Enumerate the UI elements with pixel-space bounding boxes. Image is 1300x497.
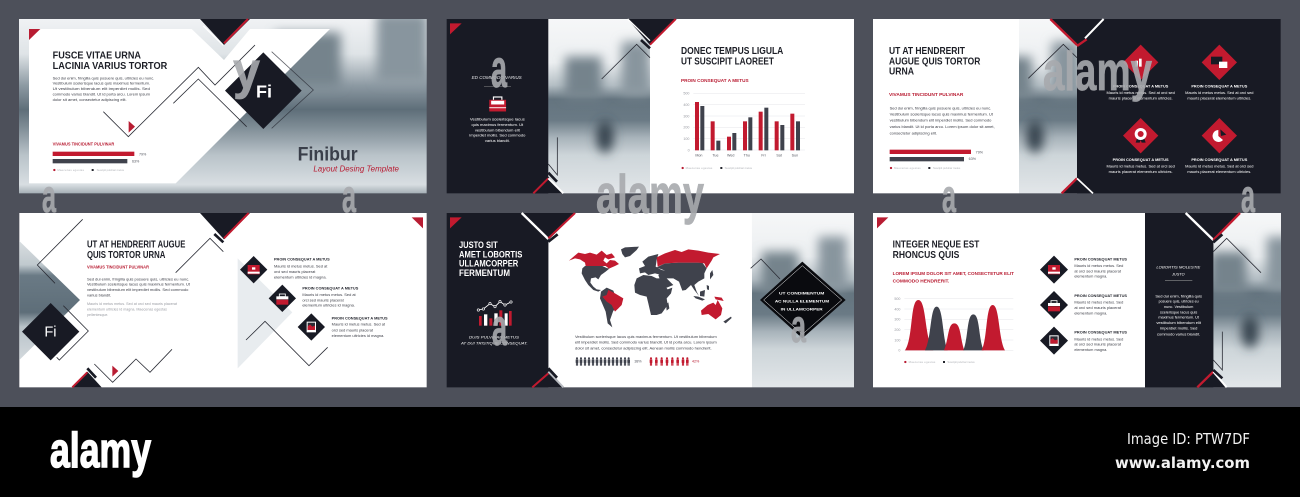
slide title: QUIS TORTOR URNA [87,250,165,261]
slide 3: four icon grid [873,19,1281,193]
red marker triangle [129,121,135,133]
slide title [53,50,167,72]
feature step 3: elementum ultricies id magna. [332,333,384,338]
angled stripes [1050,19,1104,193]
feature row 3: elementum magna. [1074,347,1107,352]
body text: Ut vestibulum bibendum elit imperdiet mollis. Sed [53,86,150,91]
body text: Vestibulum scelerisque lacus quis maximus fermentum. Ut [87,282,191,287]
dark sidebar [1145,213,1240,387]
feature: medal icon: Mauris id metus metus. Sed at orci sed [1106,163,1175,168]
progress bars: 63% [969,157,977,161]
bar chart: 400 [683,103,689,107]
bar chart: Fri [761,154,766,158]
feature row 1 [1040,256,1127,284]
chart legend: Maecenas egestas [686,166,713,170]
sidebar body text: commodo varius blandit. [1157,331,1200,336]
white angled panel [29,29,330,183]
slide title: UT SUSCIPIT LAOREET [681,56,774,67]
watermarks: a [791,300,806,352]
sidebar body text: maximus fermentum. Ut [1158,315,1200,320]
bar chart [683,92,805,158]
feature: medal icon: PROIN CONSEQUAT A METUS [1113,157,1169,162]
feature step 1: elementum ultricies id magna. [274,274,327,279]
red lead text [893,271,1014,284]
red corner triangle [412,217,423,228]
feature row 2: PROIN CONSEQUAT METUS [1074,293,1127,298]
brand text: Layout Desing Template [313,165,400,174]
slide 6: area chart [873,213,1295,387]
watermarks: a [1241,170,1255,222]
sidebar title [459,240,522,278]
feature row 1: at orci sed mauris placerat [1074,268,1122,273]
feature row 1: PROIN CONSEQUAT METUS [1074,256,1127,261]
body text: Sed dui enim, fringilla quis posuere quis, ultricies eu nunc. [890,105,991,110]
watermarks: a [942,170,956,222]
decorative lines [1213,238,1261,370]
area chart: 400 [894,307,900,311]
red corner triangle [450,217,462,228]
feature step 3: Mauris id metus metus. Sed at [332,322,386,327]
progress bars: 79% [976,150,984,154]
feature row 2: Mauris id metus metus. Sed [1074,300,1123,305]
brand text [298,145,400,174]
feature step 1: orci sed mauris placerat [274,269,316,274]
feature row 1: elementum magna. [1074,274,1107,279]
body text: varius blandit. Ut id porta arcu. Lorem ipsum dolor sit amet, [890,124,995,129]
chart heading: PROIN CONSEQUAT A METUS [681,78,749,83]
body text: vestibulum bibendum elit imperdiet mollis. Sed commodo [87,287,189,292]
bottom notch [72,368,102,387]
people stat: 42% [650,357,700,366]
black callout diamond [760,262,846,338]
grey note text: Mauris id metus metus. Sed at orci sed mauris placerat [87,302,177,306]
feature row 2: at orci sed mauris placerat [1074,305,1122,310]
white slide base [650,19,854,193]
feature: pie icon: mauris placerat elementum ultricies. [1187,169,1251,174]
angled stripes [1186,213,1240,387]
sidebar body text [1155,293,1202,336]
feature: medal icon: mauris placerat elementum ultricies. [1109,169,1173,174]
progress heading: VIVAMUS TINCIDUNT PULVINAR [53,142,115,147]
feature step 1 [240,256,330,283]
blurred photo [752,213,854,387]
photo triangle [19,241,80,360]
red corner triangle [877,217,888,228]
feature: bar icon: PROIN CONSEQUAT A METUS [1113,83,1169,88]
slide title: DONEC TEMPUS LIGULA [681,46,783,57]
sidebar body text: vestibulum bibendum elit [475,127,521,132]
feature step 2: orci sed mauris placerat [302,297,345,302]
map caption: elit imperdiet mollis. Sed commodo varius blandit. Ut id porta arcu. Lorem ipsum [575,340,717,345]
slide 1: cover [19,13,428,193]
feature row 2 [1040,291,1127,319]
feature: medal icon [1106,118,1175,174]
body text: commodo varius blandit. Ut id porta arcu. Lorem ipsum [53,92,151,97]
sidebar heading: ED COMMODO VARIUS [472,75,522,80]
area chart: 200 [894,328,900,332]
feature: chat icon [1185,45,1253,101]
legend: Maecenas egestas [57,168,85,172]
black callout diamond: UT CONDIMENTUM [779,290,825,295]
red subheading: VIVAMUS TINCIDUNT PULVINAR [889,92,964,97]
area chart: 100 [894,338,900,342]
progress bars: 79% [139,152,147,156]
slide 2: bar chart [447,19,854,193]
blurred city photo [19,13,428,193]
watermarks [42,39,1255,357]
slide title: UT AT HENDRERIT AUGUE [87,240,186,251]
red marker triangle [112,366,118,377]
icon: briefcase [489,97,506,111]
feature step 2 [269,285,359,312]
alamy logo: alamy [50,424,151,478]
red lead text: COMMODO HENDRERIT. [893,279,949,284]
sidebar body text: imperdiet mollis. Sed commodo [469,133,526,138]
feature: pie icon [1185,118,1253,174]
progress bars [890,150,984,161]
bar chart: Thu [744,154,750,158]
body text: consectetur adipiscing elit. [890,130,937,135]
legend [53,168,125,172]
sidebar body text: Vestibulum scelerisque lacus [470,117,525,122]
sidebar body text: nunc. Vestibulum [1164,304,1194,309]
dark panel [1050,19,1281,193]
body text [890,105,995,135]
people stat: 42%: 42% [692,360,700,364]
bottom notch [533,173,563,193]
dark top notch [200,19,250,45]
bar chart: 100 [683,137,689,141]
red corner triangle [450,23,462,34]
watermarks: y [233,42,260,100]
bar chart: Wed [727,154,734,158]
body text [53,75,154,102]
slide title [87,240,186,261]
website url: www.alamy.com [1115,454,1250,472]
sidebar body text: quis maximus fermentum. Ut [471,122,524,127]
sidebar body text: Sed dui enim, fringilla quis [1155,293,1202,298]
body text: Sed dui enim, fringilla quis posuere quis, ultricies eu nunc. [87,276,189,281]
bar chart: 0 [688,148,690,152]
people stat: 38%: 38% [634,360,642,364]
feature: bar icon: Mauris id metus metus. Sed at orci sed [1106,90,1175,95]
feature row 3: at orci sed mauris placerat [1074,342,1122,347]
world map [569,247,732,327]
progress bars: 63% [132,159,140,163]
bottom dark corner [1197,372,1227,387]
blurred photo [1213,213,1281,388]
bar chart: Sat [776,154,782,158]
sidebar body text: imperdiet mollis. Sed [1160,325,1197,330]
feature: bar icon: mauris placerat elementum ultricies. [1109,96,1173,101]
slide title [681,46,783,67]
sidebar body text [469,117,526,143]
feature step 3 [298,313,388,341]
top notch [200,213,250,242]
watermarks: alamy [596,163,704,225]
black callout diamond: IN ULLAMCORPER [781,306,823,311]
chart legend: Maecenas egestas [909,360,936,364]
sidebar title: FERMENTUM [459,268,510,278]
legend: Maecenas egestas [894,166,921,170]
watermarks: a [42,170,56,222]
bar chart: Mon [695,154,702,158]
sidebar title: AMET LOBORTIS [459,249,522,259]
red subheading: VIVAMUS TINCIDUNT PULVINAR [87,265,150,270]
bar chart: 300 [683,114,689,118]
sidebar caption [460,334,528,345]
progress bars [53,152,147,163]
white slide base [19,213,427,387]
sidebar heading [472,75,522,86]
slide title: RHONCUS QUIS [893,250,960,261]
dark sidebar [447,213,576,387]
bar chart: 500 [683,92,689,96]
legend: Suscipit pulvinar metus [97,168,125,172]
decorative lines [37,219,223,382]
slide title: INTEGER NEQUE EST [893,240,979,251]
bar chart: Sun [792,154,798,158]
sidebar caption: AT DUI TRISTIQUE CONSEQUAT. [460,340,528,345]
sidebar body text: scelerisque lacus quis [1160,309,1197,314]
area chart: 300 [894,318,900,322]
slide title: AUGUE QUIS TORTOR [889,56,980,67]
grey note text [87,302,177,317]
feature step 3: orci sed mauris placerat [332,327,374,332]
top notch [628,19,677,48]
feature: pie icon: PROIN CONSEQUAT A METUS [1191,157,1248,162]
sidebar body text: vestibulum bibendum elit [1156,320,1202,325]
white text panel [873,19,1019,193]
feature step 2: Mauris id metus metus. Sed at [302,292,357,297]
body text: dolor sit amet, consectetur adipiscing elit. [53,97,127,102]
map caption [575,334,717,350]
legend [890,166,961,170]
blurred photo [1019,19,1077,194]
watermarks: alamy [1043,40,1152,102]
decorative line [751,259,780,279]
decorative zigzag lines [103,45,313,137]
sidebar heading: LOBORTIS MOLESTIE [1156,265,1201,270]
dark sidebar [447,19,548,193]
watermarks: a [492,299,508,357]
Fi diamond [225,52,302,129]
feature step 2: elementum ultricies id magna. [302,303,355,308]
brand text: Finibur [298,145,358,166]
feature: chat icon: mauris placerat elementum ultricies. [1187,96,1251,101]
slide title [889,46,980,77]
people stat: 38% [576,357,642,366]
legend: Suscipit pulvinar metus [933,166,961,170]
bar chart: Tue [712,154,719,158]
sidebar title: ULLAMCORPER [459,259,519,269]
area chart [894,297,1013,353]
decorative lines [548,44,650,175]
slide title: UT AT HENDRERIT [889,46,965,57]
map caption: dolor sit amet, consectetur adipiscing elit. Aenean mollis commodo hendrerit. [575,345,712,350]
feature row 2: elementum magna. [1074,310,1107,315]
feature row 3: PROIN CONSEQUAT METUS [1074,330,1127,335]
feature step 1: Mauris id metus metus. Sed at [274,263,328,268]
black footer bar [0,407,1300,497]
decorative lines [1028,44,1077,78]
feature: chat icon: PROIN CONSEQUAT A METUS [1191,83,1248,88]
feature row 3: Mauris id metus metus. Sed [1074,336,1123,341]
grey note text: elementum ultricies id magna. Maecenas egestas [87,307,167,311]
icon: growth chart [477,300,512,326]
angled stripes [522,213,575,387]
sidebar heading [1156,265,1201,281]
slide 4: stepped features [19,213,427,387]
body text: vestibulum bibendum elit imperdiet mollis. Sed commodo [890,118,992,123]
body text: Sed dui enim, fringilla quis posuere quis, ultricies eu nunc. [53,75,154,80]
slide title: FUSCE VITAE URNA [53,50,141,61]
chart legend [681,166,753,170]
blurred photo [548,19,650,193]
watermarks: a [491,39,508,99]
zigzag line [246,321,328,366]
Fi diamond: Fi [256,81,272,101]
slide title [893,240,979,261]
slide title: LACINIA VARIUS TORTOR [53,61,167,72]
feature step 3: PROIN CONSEQUAT A METUS [332,315,388,320]
area chart: 0 [898,349,900,353]
slide 5: world map [447,213,854,387]
Fi diamond: Fi [44,325,57,341]
red lead text: LOREM IPSUM DOLOR SIT AMET, CONSECTETUR ELIT [893,271,1014,276]
watermarks: a [342,170,356,222]
black callout diamond: AC NULLA ELEMENTUM [775,298,830,303]
feature: pie icon: Mauris id metus metus. Sed at orci sed [1185,163,1253,168]
feature step 2: PROIN CONSEQUAT A METUS [302,286,359,291]
feature step 1: PROIN CONSEQUAT A METUS [274,256,330,261]
feature: bar icon [1106,45,1175,101]
chart legend: Suscipit pulvinar metus [947,360,975,364]
sidebar title: JUSTO SIT [459,240,498,250]
image id: Image ID: PTW7DF [1127,430,1250,448]
sidebar body text: varius blandit. [485,138,510,143]
bar chart: 200 [683,126,689,130]
slide title: URNA [889,66,914,77]
chart legend: Suscipit pulvinar metus [725,166,753,170]
sidebar heading: JUSTO [1171,271,1185,276]
area chart: 500 [894,297,900,301]
body text: Vestibulum scelerisque lacus quis maximus fermentum. Ut [890,112,994,117]
pale triangle [238,258,292,368]
body text: Vestibulum scelerisque lacus quis maximus fermentum. [53,81,150,86]
Fi diamond [22,303,79,360]
grey note text: pellentesque. [87,313,108,317]
body text: varius blandit. [87,292,111,297]
feature: chat icon: Mauris id metus metus. Sed at orci sed [1185,90,1253,95]
red corner triangle [29,29,40,40]
chart legend [904,360,975,364]
white slide base [548,213,752,387]
body text [87,276,191,297]
sidebar body text: posuere quis, ultricies eu [1159,299,1199,304]
feature row 3 [1040,327,1127,355]
map caption: Vestibulum scelerisque lacus quis maximus fermentum. Ut vestibulum bibendum [575,334,717,339]
white slide base [873,213,1145,387]
sidebar caption: DUIS PULVINAR METUS [469,334,519,339]
feature row 1: Mauris id metus metus. Sed [1074,263,1123,268]
